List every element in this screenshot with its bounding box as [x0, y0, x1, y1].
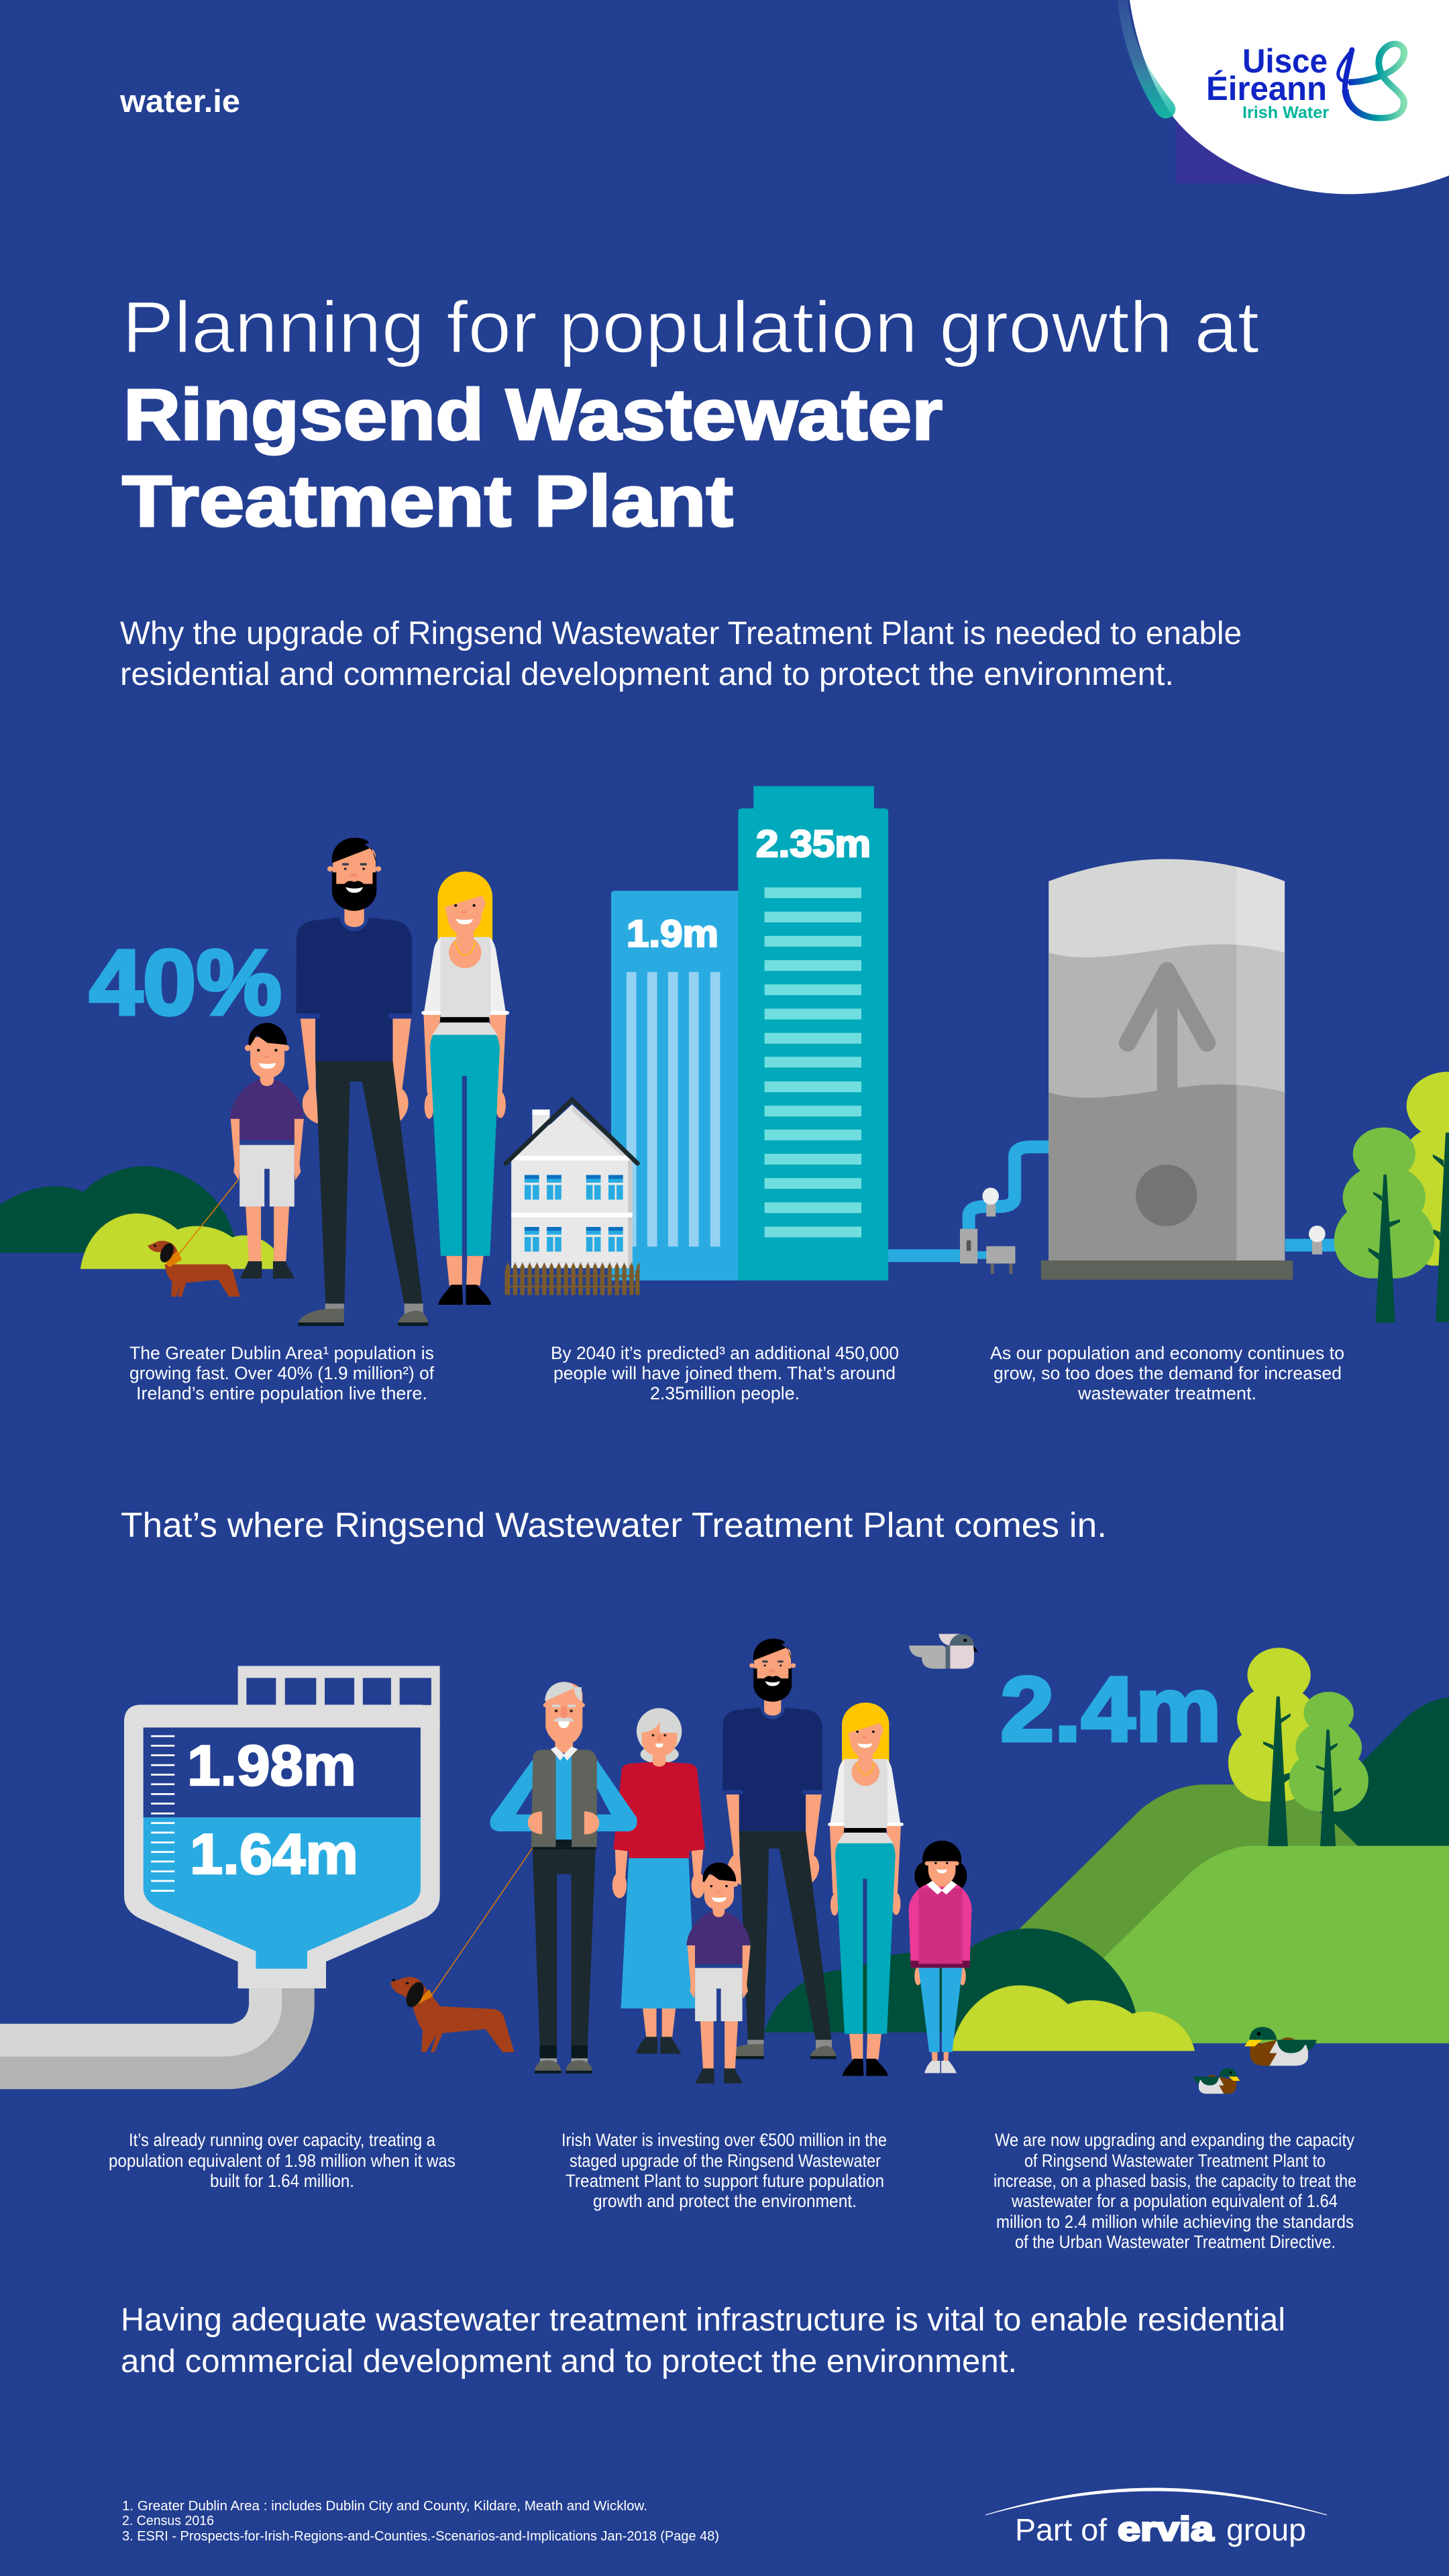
icon: flying bird	[909, 1634, 978, 1668]
footnotes: 1. Greater Dublin Area : includes Dublin City and County, Kildare, Meath and Wicklow.	[122, 2499, 647, 2514]
caption: over capacity: It’s already running over capacity, treating a	[129, 2130, 435, 2150]
intro text: residential and commercial development and to protect the environment.	[120, 657, 1174, 692]
stat: 1.64m: 1.64m	[190, 1823, 358, 1886]
caption: over capacity: population equivalent of 1.98 million when it was	[109, 2151, 455, 2171]
footnotes: 3. ESRI - Prospects-for-Irish-Regions-and-Counties.-Scenarios-and-Implications Jan-2018 (Page 48)	[122, 2529, 719, 2544]
caption: demand for wastewater treatment: As our population and economy continues to	[990, 1343, 1344, 1363]
ervia group logo: ervia	[1118, 2510, 1214, 2548]
title: Planning for population growth at	[122, 286, 1259, 368]
title: Ringsend Wastewater	[123, 374, 943, 455]
outflow pipe and trees at right	[1285, 1072, 1449, 1323]
rack on top of tank	[238, 1666, 440, 1728]
dog on lead	[148, 1179, 240, 1297]
buildings	[611, 786, 888, 1281]
tree: green	[1289, 1692, 1368, 1812]
caption: upgrade to 2.4 million: of the Urban Wastewater Treatment Directive.	[1015, 2232, 1336, 2252]
caption: upgrade to 2.4 million	[994, 2130, 1356, 2252]
icon: large duck	[1244, 2027, 1317, 2065]
measuring tank with pipe	[0, 1666, 440, 2089]
tank shell	[124, 1705, 440, 1988]
ervia group logo	[985, 2488, 1327, 2548]
caption: 2040 prediction: people will have joined them. That’s around	[553, 1363, 896, 1383]
figure: man, scene 2	[722, 1639, 837, 2059]
ervia group logo: group	[1226, 2512, 1306, 2547]
label: 2.35m: 2.35m	[756, 822, 871, 865]
caption: demand for wastewater treatment	[990, 1343, 1344, 1403]
caption: investment	[561, 2130, 887, 2211]
caption: over capacity	[109, 2130, 455, 2191]
caption: over capacity: built for 1.64 million.	[210, 2171, 354, 2191]
figure: woman, scene 2	[828, 1703, 904, 2076]
hills and bushes	[764, 1634, 1449, 2094]
caption: Greater Dublin population: Ireland’s entire population live there.	[136, 1383, 427, 1403]
caption: upgrade to 2.4 million: We are now upgrading and expanding the capacity	[995, 2130, 1355, 2150]
logo badge: Uisce Éireann Irish Water	[1118, 0, 1449, 194]
building: 2.35m	[738, 786, 888, 1281]
tree: lime	[1395, 1072, 1449, 1266]
caption: upgrade to 2.4 million: wastewater for a population equivalent of 1.64	[1011, 2191, 1338, 2211]
icon: small duck	[1193, 2068, 1240, 2094]
caption: Greater Dublin population: growing fast. Over 40% (1.9 million²) of	[129, 1363, 435, 1383]
logo badge: Uisce Éireann Irish Water: Irish Water	[1242, 103, 1329, 122]
stat: 1.98m: 1.98m	[187, 1734, 356, 1798]
caption: 2040 prediction: By 2040 it’s predicted³ an additional 450,000	[551, 1343, 899, 1363]
caption: upgrade to 2.4 million: increase, on a phased basis, the capacity to treat the	[994, 2171, 1356, 2191]
figure: man	[295, 838, 428, 1326]
footnotes: 2. Census 2016	[122, 2514, 214, 2528]
scale ticks	[151, 1735, 174, 1892]
caption: upgrade to 2.4 million: million to 2.4 million while achieving the standards	[996, 2212, 1354, 2232]
title	[122, 286, 1259, 541]
figure: boy, scene 2	[686, 1862, 751, 2084]
caption: investment: growth and protect the environment.	[593, 2191, 857, 2211]
stat: 40%: 40%	[89, 931, 282, 1034]
building: 1.9m	[611, 891, 738, 1281]
treatment tank with up arrow	[1041, 859, 1293, 1280]
ervia group logo: Part of	[1015, 2512, 1107, 2547]
fence	[505, 1263, 640, 1295]
title: Treatment Plant	[122, 460, 733, 541]
caption: investment: Treatment Plant to support future population	[566, 2171, 884, 2191]
pipe	[0, 1988, 315, 2089]
pipes and valve between buildings and tank	[888, 1147, 1049, 1274]
caption: investment: Irish Water is investing over €500 million in the	[561, 2130, 887, 2150]
intro text	[120, 616, 1242, 692]
closing statement: Having adequate wastewater treatment infrastructure is vital to enable residential	[121, 2302, 1285, 2338]
dog on lead, scene 2	[390, 1834, 542, 2052]
caption: demand for wastewater treatment: wastewater treatment.	[1077, 1383, 1256, 1403]
scene 1 bushes	[0, 1166, 274, 1269]
figure: grandmother	[612, 1708, 705, 2053]
tree: green	[1334, 1128, 1434, 1279]
closing statement	[121, 2302, 1285, 2379]
caption: Greater Dublin population: The Greater Dublin Area¹ population is	[129, 1343, 434, 1363]
water level	[144, 1817, 421, 1969]
caption: demand for wastewater treatment: grow, so too does the demand for increased	[994, 1363, 1342, 1383]
caption: 2040 prediction	[551, 1343, 899, 1403]
figure: boy	[229, 1023, 304, 1279]
figure: girl	[909, 1841, 971, 2073]
caption: investment: staged upgrade of the Ringsend Wastewater	[570, 2151, 881, 2171]
label: 1.9m: 1.9m	[627, 912, 718, 955]
website address: water.ie	[119, 83, 240, 119]
section heading: That’s where Ringsend Wastewater Treatment Plant comes in.	[121, 1506, 1107, 1545]
house	[505, 1099, 640, 1295]
closing statement: and commercial development and to protect the environment.	[121, 2344, 1017, 2379]
logo badge: Uisce Éireann Irish Water: Éireann	[1206, 70, 1327, 107]
caption: upgrade to 2.4 million: of Ringsend Wastewater Treatment Plant to	[1024, 2151, 1326, 2171]
stat: 2.4m: 2.4m	[1000, 1658, 1222, 1761]
footnotes	[122, 2499, 719, 2544]
tree: lime	[1228, 1648, 1318, 1801]
figure: grandfather	[490, 1682, 637, 2074]
intro text: Why the upgrade of Ringsend Wastewater Treatment Plant is needed to enable	[120, 616, 1242, 651]
figure: woman	[421, 871, 509, 1305]
caption: 2040 prediction: 2.35million people.	[650, 1383, 800, 1403]
caption: Greater Dublin population	[129, 1343, 435, 1403]
icon: up arrow	[1128, 971, 1207, 1092]
logo badge: Uisce Éireann Irish Water: Uisce	[1242, 42, 1328, 80]
